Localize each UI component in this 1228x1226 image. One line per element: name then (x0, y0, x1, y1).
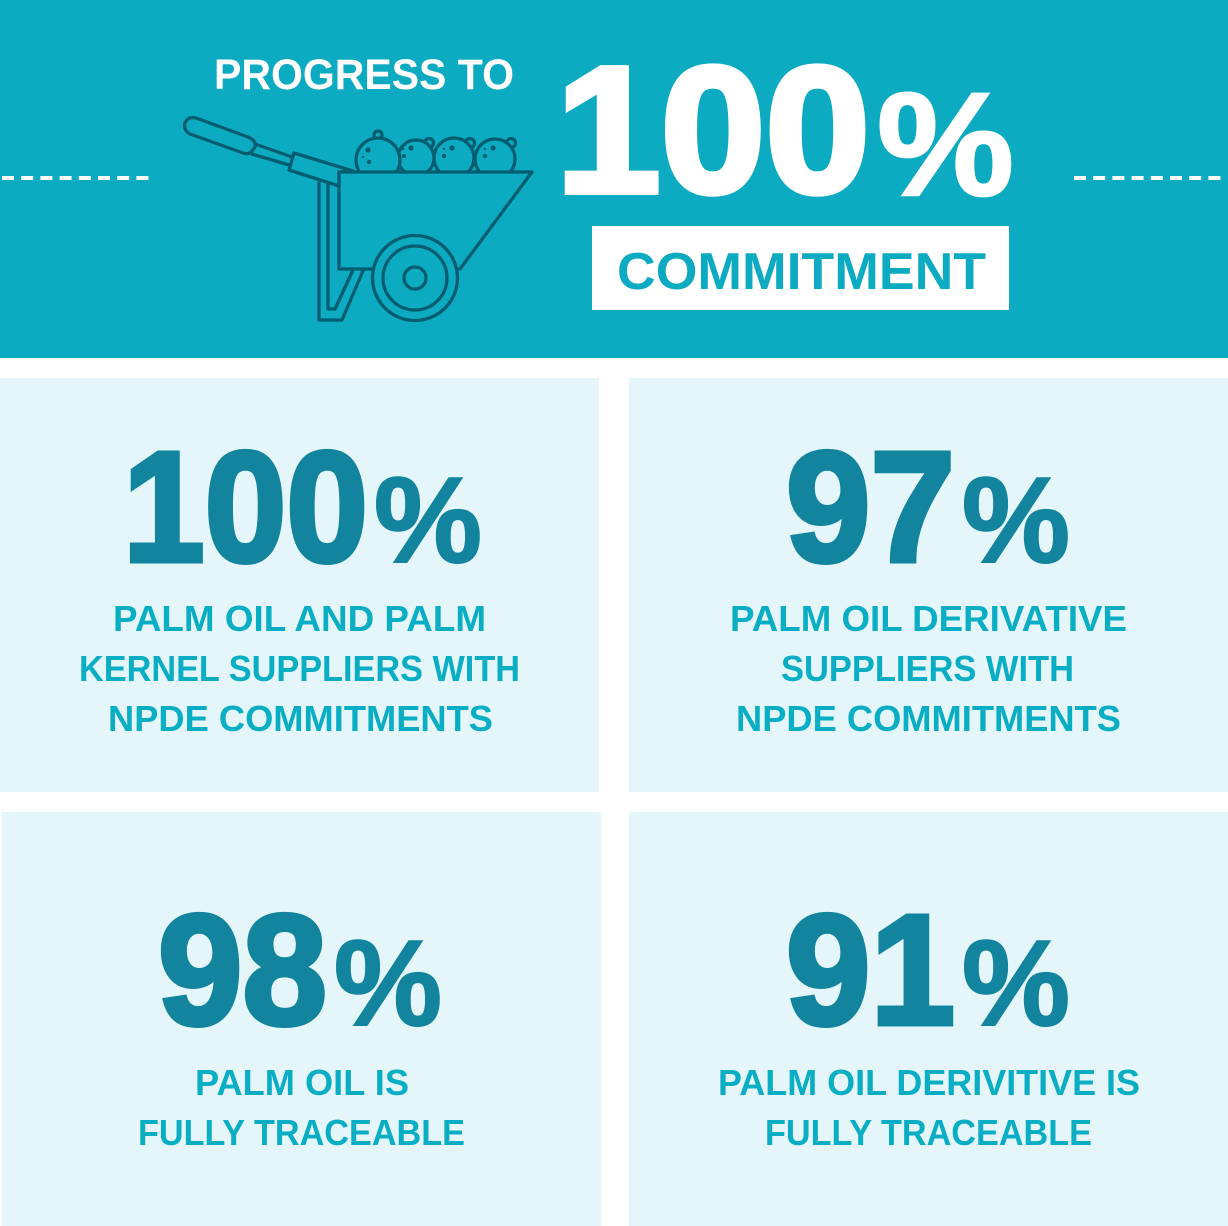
label: palm oil fully traceable: PALM OIL IS (195, 1062, 409, 1103)
panel: derivative traceability (629, 812, 1228, 1226)
stat: 97 percent (786, 420, 1070, 595)
label: derivative suppliers with NPDE commitments: NPDE COMMITMENTS (736, 698, 1121, 739)
panel: derivative suppliers (629, 378, 1228, 792)
commitment label box: COMMITMENT (617, 243, 986, 301)
label: derivative suppliers with NPDE commitments: SUPPLIERS WITH (781, 648, 1074, 689)
stat: 98 percent: % (334, 915, 442, 1051)
stat: 91 percent: % (962, 915, 1070, 1051)
stat: 97 percent: % (962, 452, 1070, 588)
stat: 98 percent (158, 883, 442, 1058)
stat: 97 percent: 97 (786, 420, 955, 595)
panel: palm oil traceability (2, 812, 601, 1226)
big number: 100 percent (556, 30, 1014, 231)
label: suppliers with NPDE commitments: NPDE COMMITMENTS (108, 698, 493, 739)
icon: wheelbarrow of palm fruit (185, 118, 532, 320)
label: palm oil fully traceable: FULLY TRACEABLE (138, 1112, 465, 1153)
label: derivative suppliers with NPDE commitments: PALM OIL DERIVATIVE (730, 598, 1127, 639)
stat: 91 percent (786, 883, 1070, 1058)
label: palm oil fully traceable (138, 1062, 465, 1153)
panel: palm oil and kernel suppliers (0, 378, 599, 792)
stat: 91 percent: 91 (786, 883, 955, 1058)
big number: 100 percent: % (877, 63, 1014, 227)
label: derivative suppliers with NPDE commitments (730, 598, 1127, 739)
label: derivative fully traceable: PALM OIL DERIVITIVE IS (718, 1062, 1140, 1103)
label: suppliers with NPDE commitments: KERNEL SUPPLIERS WITH (79, 648, 520, 689)
stat: 100 percent: 100 (123, 420, 368, 595)
label: derivative fully traceable: FULLY TRACEABLE (765, 1112, 1092, 1153)
commitment label box (592, 226, 1009, 310)
label: suppliers with NPDE commitments: PALM OIL AND PALM (113, 598, 486, 639)
heading: progress to: PROGRESS TO (214, 51, 514, 99)
panel: header banner (0, 0, 1228, 358)
stat: 100 percent: % (374, 452, 482, 588)
label: derivative fully traceable (718, 1062, 1140, 1153)
label: suppliers with NPDE commitments (79, 598, 520, 739)
stat: 98 percent: 98 (158, 883, 327, 1058)
big number: 100 percent: 100 (556, 30, 870, 231)
